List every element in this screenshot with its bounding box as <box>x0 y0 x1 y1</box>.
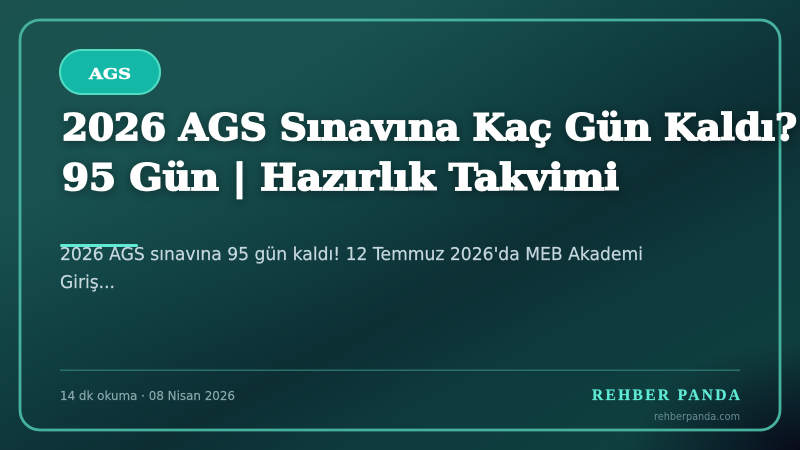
category badge: AGS <box>88 65 131 83</box>
description <box>60 245 643 293</box>
brand name: REHBER PANDA <box>592 387 741 404</box>
website: rehberpanda.com <box>654 411 740 423</box>
footer divider <box>60 370 740 371</box>
accent line <box>60 244 138 247</box>
reading time and date: 14 dk okuma · 08 Nisan 2026 <box>60 389 235 403</box>
title: 2026 AGS Sınavına Kaç Gün Kaldı? <box>62 107 797 149</box>
category badge <box>60 50 160 94</box>
title: 95 Gün | Hazırlık Takvimi <box>62 157 619 199</box>
description: 2026 AGS sınavına 95 gün kaldı! 12 Temmuz 2026'da MEB Akademi <box>60 245 643 265</box>
description: Giriş... <box>60 273 115 293</box>
title <box>62 107 797 199</box>
